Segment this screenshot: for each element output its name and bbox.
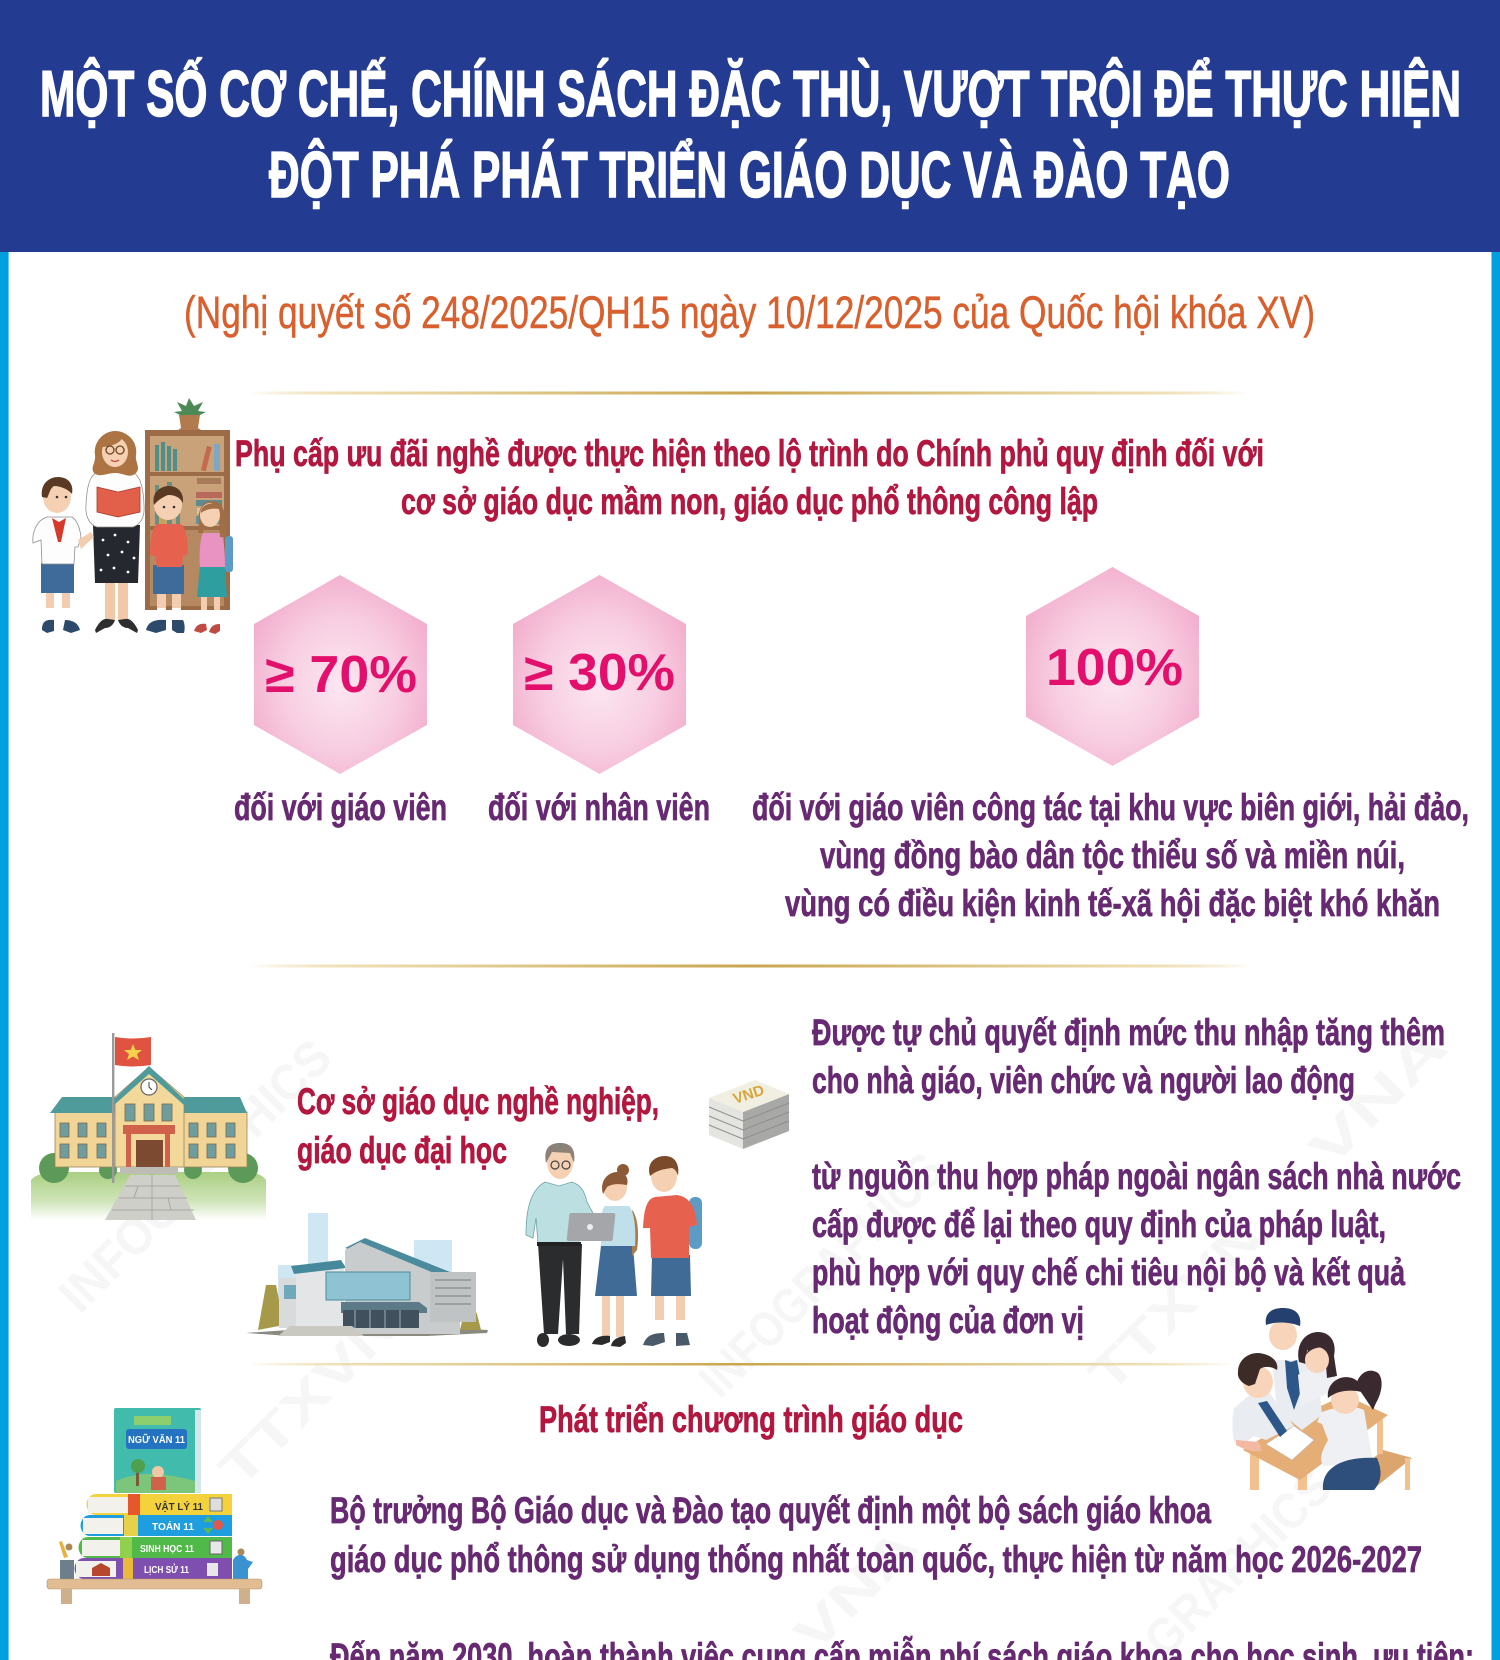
icon: stack of textbooks on a shelf: VẬT LÝ 11 bbox=[155, 1500, 203, 1513]
panel: education programme bbox=[47, 1308, 1474, 1660]
heading: vocational and higher education: giáo dục đại học bbox=[297, 1130, 507, 1171]
icon: stack of textbooks on a shelf: LỊCH SỬ 11 bbox=[144, 1563, 189, 1576]
text: INFOGRAPHICS bbox=[48, 1029, 342, 1323]
stat: at least 70 percent bbox=[254, 575, 427, 774]
text block: income sources bbox=[812, 1156, 1461, 1341]
left side bar bbox=[0, 252, 9, 1660]
right side bar bbox=[1492, 252, 1500, 1660]
icon: stack of textbooks on a shelf: TOÁN 11 bbox=[152, 1520, 194, 1533]
icon: school with flag bbox=[31, 1033, 266, 1220]
heading: allowance bbox=[235, 433, 1264, 522]
text: INFOGRAPHICS bbox=[688, 1142, 954, 1408]
text block: unified textbook set bbox=[330, 1490, 1422, 1580]
panel: teaching allowance bbox=[33, 398, 1469, 924]
stat: at least 70 percent: ≥ 70% bbox=[265, 646, 417, 704]
icon: teacher with pupils and bookshelf bbox=[33, 398, 233, 634]
stat: at least 30 percent bbox=[513, 575, 686, 774]
heading: vocational and higher education bbox=[297, 1081, 659, 1171]
text: TTXVN bbox=[208, 1296, 410, 1498]
panel: vocational and higher education bbox=[31, 1012, 1461, 1347]
icon: modern campus building bbox=[246, 1213, 488, 1336]
text: TTXVN bbox=[1078, 1208, 1273, 1403]
text block: income decision bbox=[812, 1012, 1445, 1101]
text: VNA bbox=[1298, 1018, 1458, 1178]
stat: 100 percent: 100% bbox=[1046, 639, 1183, 697]
label: teachers in disadvantaged regions bbox=[752, 787, 1469, 924]
text: VNA bbox=[783, 1517, 929, 1660]
stat: 100 percent bbox=[1026, 567, 1199, 766]
header banner bbox=[0, 0, 1500, 252]
label: staff: đối với nhân viên bbox=[488, 787, 710, 828]
icon: stack of VND banknotes bbox=[709, 1080, 789, 1149]
icon: stack of VND banknotes: VND bbox=[731, 1082, 767, 1108]
icon: stack of textbooks on a shelf: NGỮ VĂN 11 bbox=[128, 1433, 185, 1446]
stat: at least 30 percent: ≥ 30% bbox=[524, 644, 675, 702]
label: teachers: đối với giáo viên bbox=[234, 787, 447, 828]
icon: students studying at a desk bbox=[1232, 1308, 1412, 1490]
heading: vocational and higher education: Cơ sở giáo dục nghề nghiệp, bbox=[297, 1081, 659, 1122]
icon: stack of textbooks on a shelf bbox=[47, 1408, 262, 1604]
text block: income sources: hoạt động của đơn vị bbox=[812, 1300, 1084, 1341]
icon: teacher and two students with laptop bbox=[526, 1143, 702, 1347]
heading: allowance: cơ sở giáo dục mầm non, giáo dục phổ thông công lập bbox=[401, 481, 1098, 522]
icon: stack of textbooks on a shelf: SINH HỌC 11 bbox=[140, 1544, 194, 1555]
heading: education programme: Phát triển chương trình giáo dục bbox=[539, 1399, 963, 1440]
